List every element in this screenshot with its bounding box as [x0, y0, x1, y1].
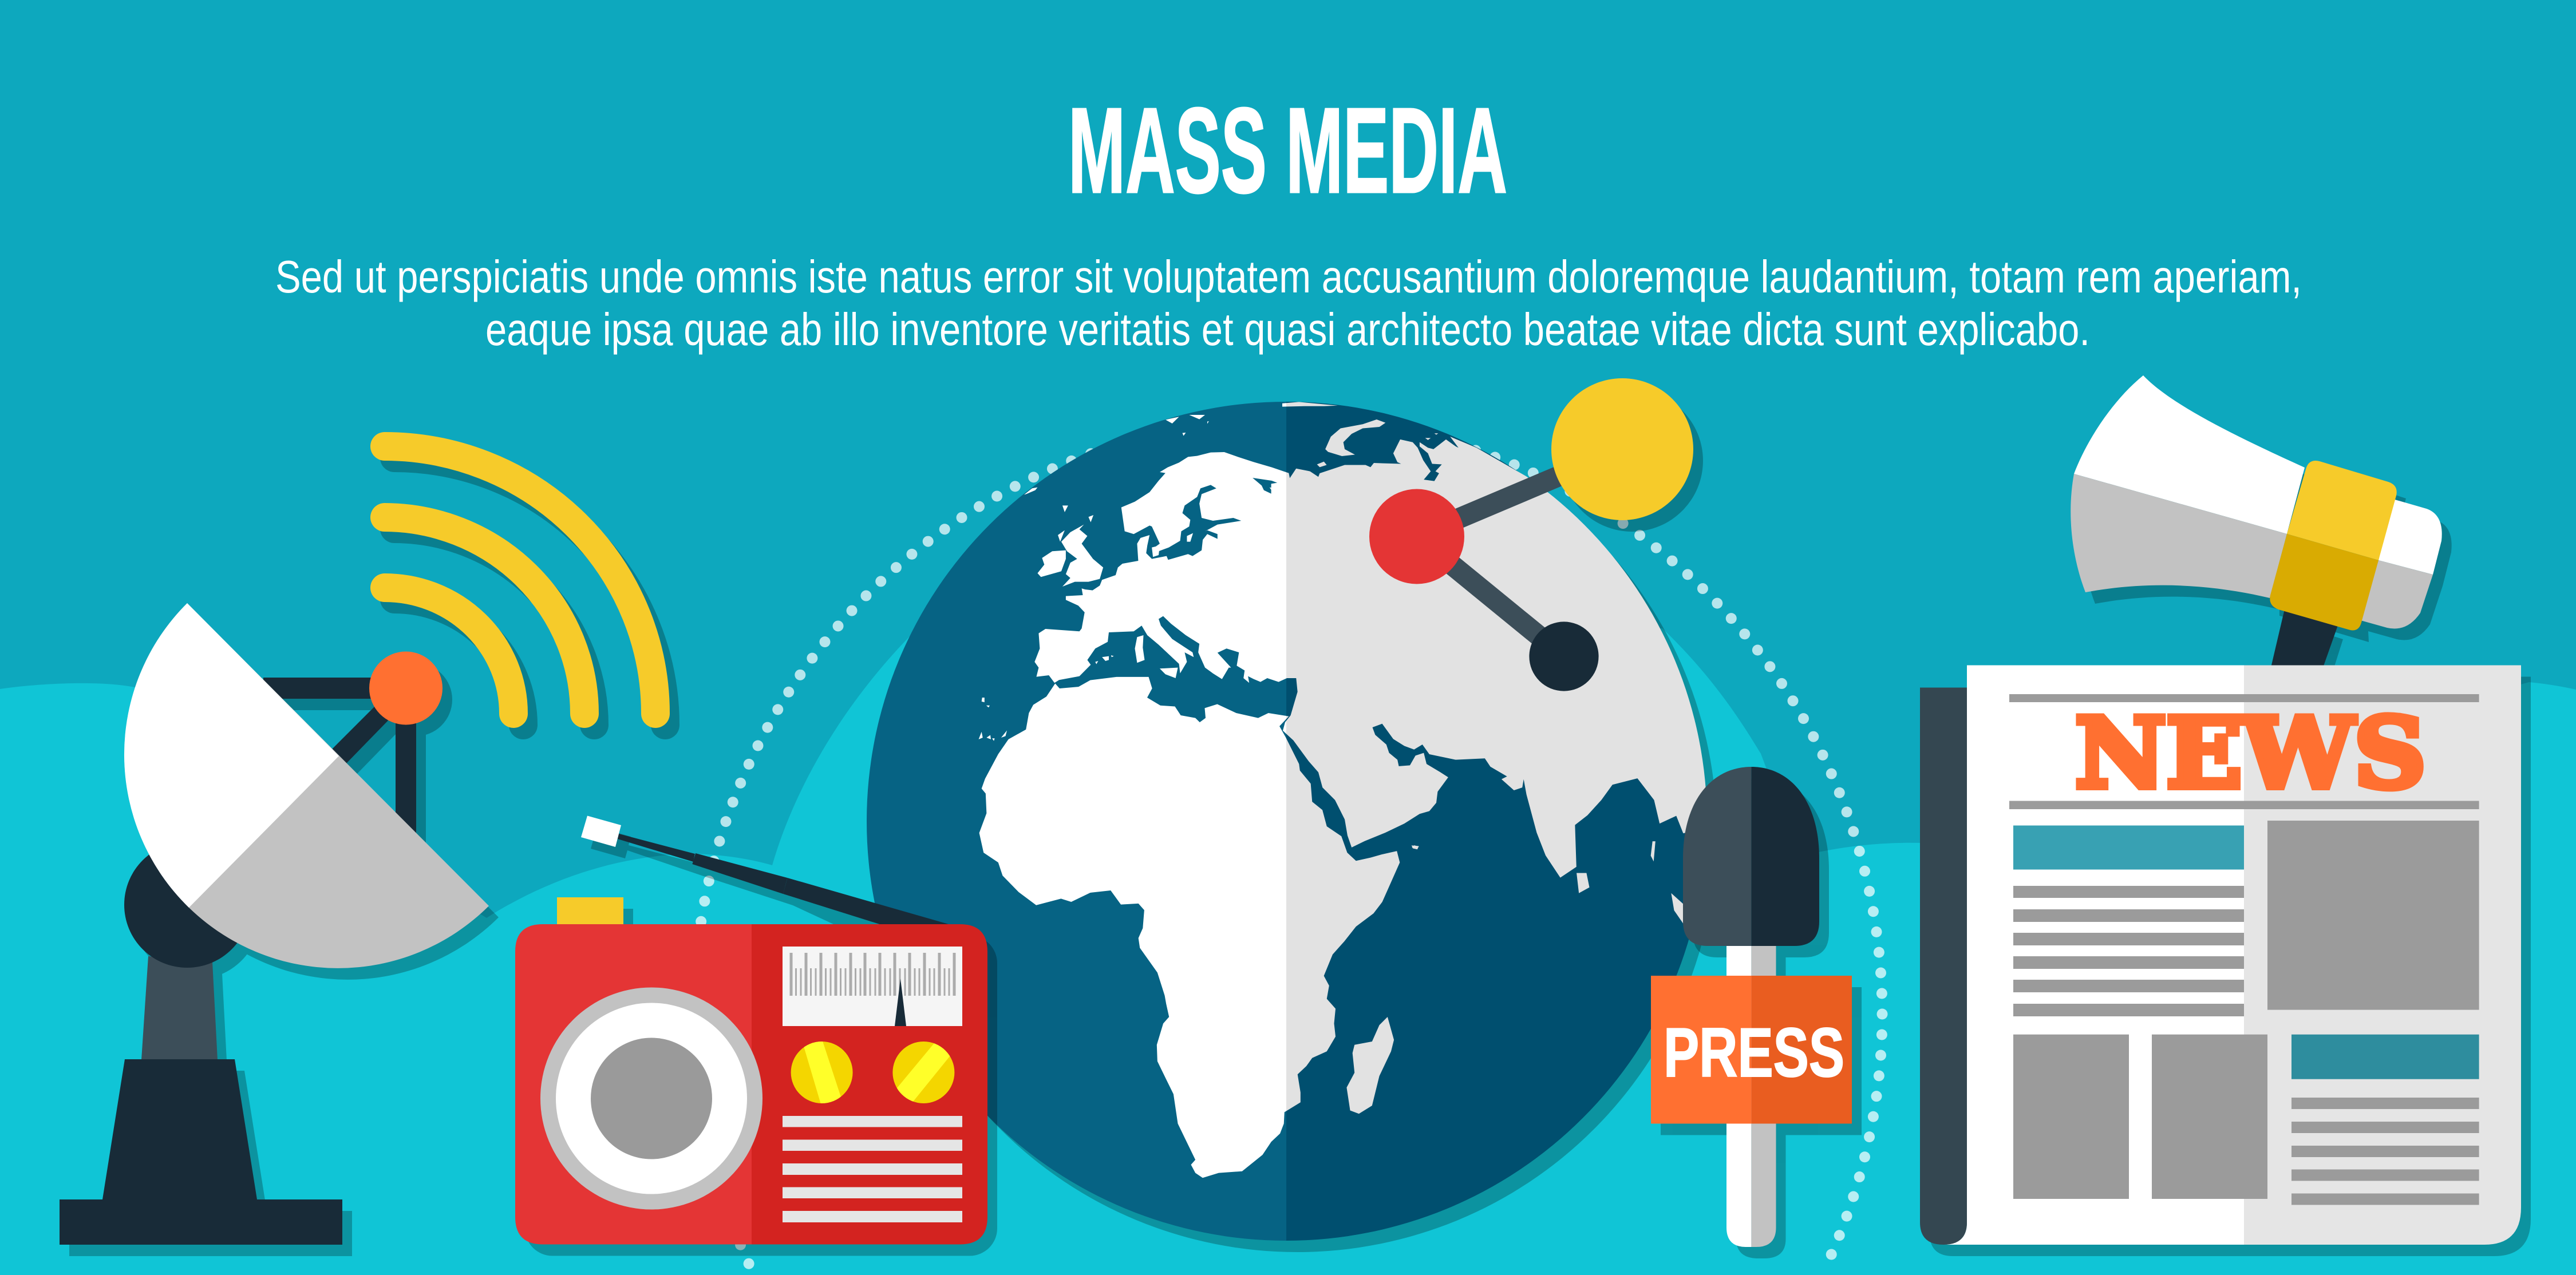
megaphone: bell shaded	[2071, 474, 2287, 598]
globe: right ocean	[1286, 402, 1706, 1241]
radio: antenna	[618, 834, 949, 924]
radio: right knob	[892, 1040, 954, 1104]
newspaper: right headline block	[2291, 1035, 2479, 1079]
newspaper: right text lines	[2291, 1098, 2479, 1205]
dish: lit half	[124, 603, 339, 908]
intro paragraph	[275, 251, 2302, 355]
background: lighter wave hills	[0, 628, 2576, 1275]
megaphone: bell lit	[2074, 375, 2305, 534]
newspaper: left text lines	[2013, 886, 2244, 1016]
radio: speaker	[540, 988, 762, 1210]
icon: wifi signal arcs	[385, 446, 665, 725]
icon: megaphone	[2071, 375, 2452, 677]
title: MASS MEDIA	[1068, 82, 1507, 218]
radio: left knob	[791, 1039, 853, 1107]
mic: handle left	[1726, 946, 1751, 1247]
megaphone: rear shaded	[2358, 560, 2433, 629]
radio: antenna tip	[581, 816, 621, 847]
megaphone: rear lit	[2379, 499, 2442, 575]
node: red	[1369, 489, 1464, 584]
dotted orbit ring	[694, 420, 1882, 1268]
dish: orange receiver	[369, 651, 442, 724]
globe: left ocean	[867, 402, 1286, 1241]
dish: feed struts	[263, 678, 416, 833]
dish: pivot ball	[124, 842, 250, 968]
intro paragraph: eaque ipsa quae ab illo inventore veritatis et quasi architecto beatae vitae dicta sunt explicabo.	[485, 304, 2090, 355]
dish: shaded half	[124, 603, 489, 968]
globe	[867, 402, 1726, 1241]
node: yellow	[1551, 378, 1693, 520]
newspaper: page right	[2244, 665, 2521, 1245]
shadow: globe and yellow node	[878, 390, 1717, 1252]
newspaper: rules	[2009, 694, 2479, 809]
mic: head left	[1683, 767, 1751, 946]
newspaper: page left	[1943, 665, 2244, 1245]
icon: press microphone	[1651, 767, 1862, 1258]
network nodes on globe	[1369, 378, 1693, 691]
newspaper: masthead: NEWS	[2075, 696, 2426, 810]
icon: newspaper	[1920, 665, 2531, 1256]
radio: tuning dial	[783, 947, 962, 1026]
newspaper: spine	[1920, 688, 1967, 1245]
newspaper: left headline block	[2013, 825, 2244, 870]
connector lines	[1417, 449, 1622, 656]
node: dark	[1529, 621, 1599, 691]
press label: PRESS	[1664, 1013, 1844, 1091]
continents: Europe, Africa and Asia	[979, 402, 1726, 1178]
newspaper: small photos	[2013, 1035, 2267, 1199]
dish: post	[141, 956, 218, 1060]
press flag left	[1651, 976, 1751, 1124]
dish: base	[60, 1059, 342, 1245]
mic: head right	[1751, 767, 1819, 946]
radio: handle	[557, 897, 623, 926]
radio: body right	[752, 924, 987, 1244]
radio: grille	[783, 1116, 962, 1222]
megaphone: band bottom	[2270, 534, 2379, 631]
megaphone: band top	[2287, 461, 2397, 560]
radio: body left	[515, 924, 752, 1244]
newspaper: large photo	[2267, 821, 2479, 1010]
megaphone: handle	[2270, 607, 2338, 672]
press flag right	[1751, 976, 1852, 1124]
icon: satellite dish	[60, 603, 499, 1256]
mic: handle right	[1751, 946, 1776, 1247]
icon: radio	[515, 816, 997, 1256]
